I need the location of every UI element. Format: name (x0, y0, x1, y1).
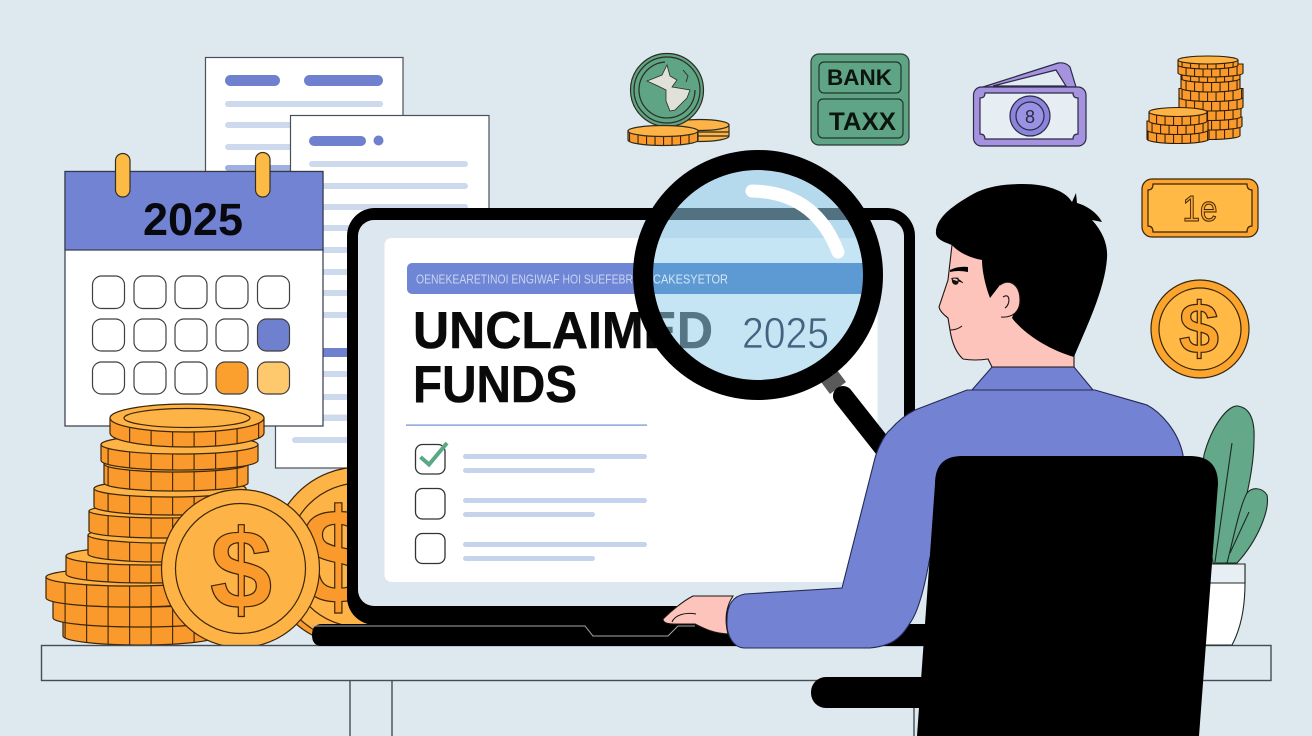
ear (1000, 282, 1020, 317)
eyebrow (950, 267, 968, 272)
screen panel (384, 238, 878, 582)
calendar year: 2025 (143, 194, 243, 245)
icon: banknotes (974, 63, 1086, 146)
icon: globe coin with coins (628, 54, 729, 146)
divider (406, 424, 647, 426)
collar (972, 367, 1093, 390)
panel: calendar (65, 152, 323, 426)
face and neck (939, 245, 1074, 367)
hair (936, 184, 1107, 357)
icon: orange bill (1142, 179, 1258, 237)
icon: bank and tax sign (811, 54, 909, 145)
icon: orange bill: 1e (1182, 188, 1218, 229)
icon: stacked coins (1147, 56, 1243, 144)
icon: dollar coin (1151, 280, 1249, 378)
office chair (811, 456, 1218, 736)
calendar rings (116, 152, 270, 197)
laptop base (312, 624, 925, 646)
heading: UNCLAIMED (413, 302, 713, 360)
heading: FUNDS (413, 356, 577, 414)
icon: bank and tax sign: TAXX (829, 108, 896, 136)
person (663, 184, 1190, 700)
hand (663, 596, 733, 634)
lens ring (643, 160, 873, 390)
eye (951, 278, 963, 284)
magnifying glass (640, 160, 892, 458)
front dollar coin: $ (210, 507, 272, 632)
icon: bank and tax sign: BANK (827, 65, 892, 90)
lens (651, 168, 865, 382)
back dollar coin (267, 467, 448, 645)
calendar header (65, 172, 323, 250)
magnifier handle (826, 372, 892, 458)
lens banner text: CAKESYETOR (653, 272, 728, 286)
desk (42, 646, 1271, 736)
icon: dollar coin: $ (1179, 289, 1219, 369)
icon: banknotes: 8 (1025, 107, 1035, 127)
banner: OENEKEARETINOI ENGIWAF HOI SUEFEBR (416, 272, 633, 286)
lens banner (653, 263, 863, 294)
icon: potted plant (1200, 406, 1267, 645)
banner (407, 263, 877, 294)
front dollar coin (162, 490, 320, 648)
panel: front document (276, 116, 489, 468)
back dollar coin: $ (300, 481, 376, 632)
lens year text: 2025 (742, 309, 829, 358)
mouth (950, 326, 962, 330)
checklist (416, 443, 647, 564)
calendar day cells (92, 276, 290, 394)
shirt and arm (727, 390, 1190, 700)
heading (413, 302, 713, 414)
chair back (917, 456, 1218, 736)
chair armrest (811, 677, 941, 708)
lens highlight (752, 191, 838, 252)
coin stack (46, 404, 264, 645)
laptop screen bezel (347, 208, 915, 625)
laptop (312, 208, 925, 646)
panel: back document (206, 58, 403, 358)
